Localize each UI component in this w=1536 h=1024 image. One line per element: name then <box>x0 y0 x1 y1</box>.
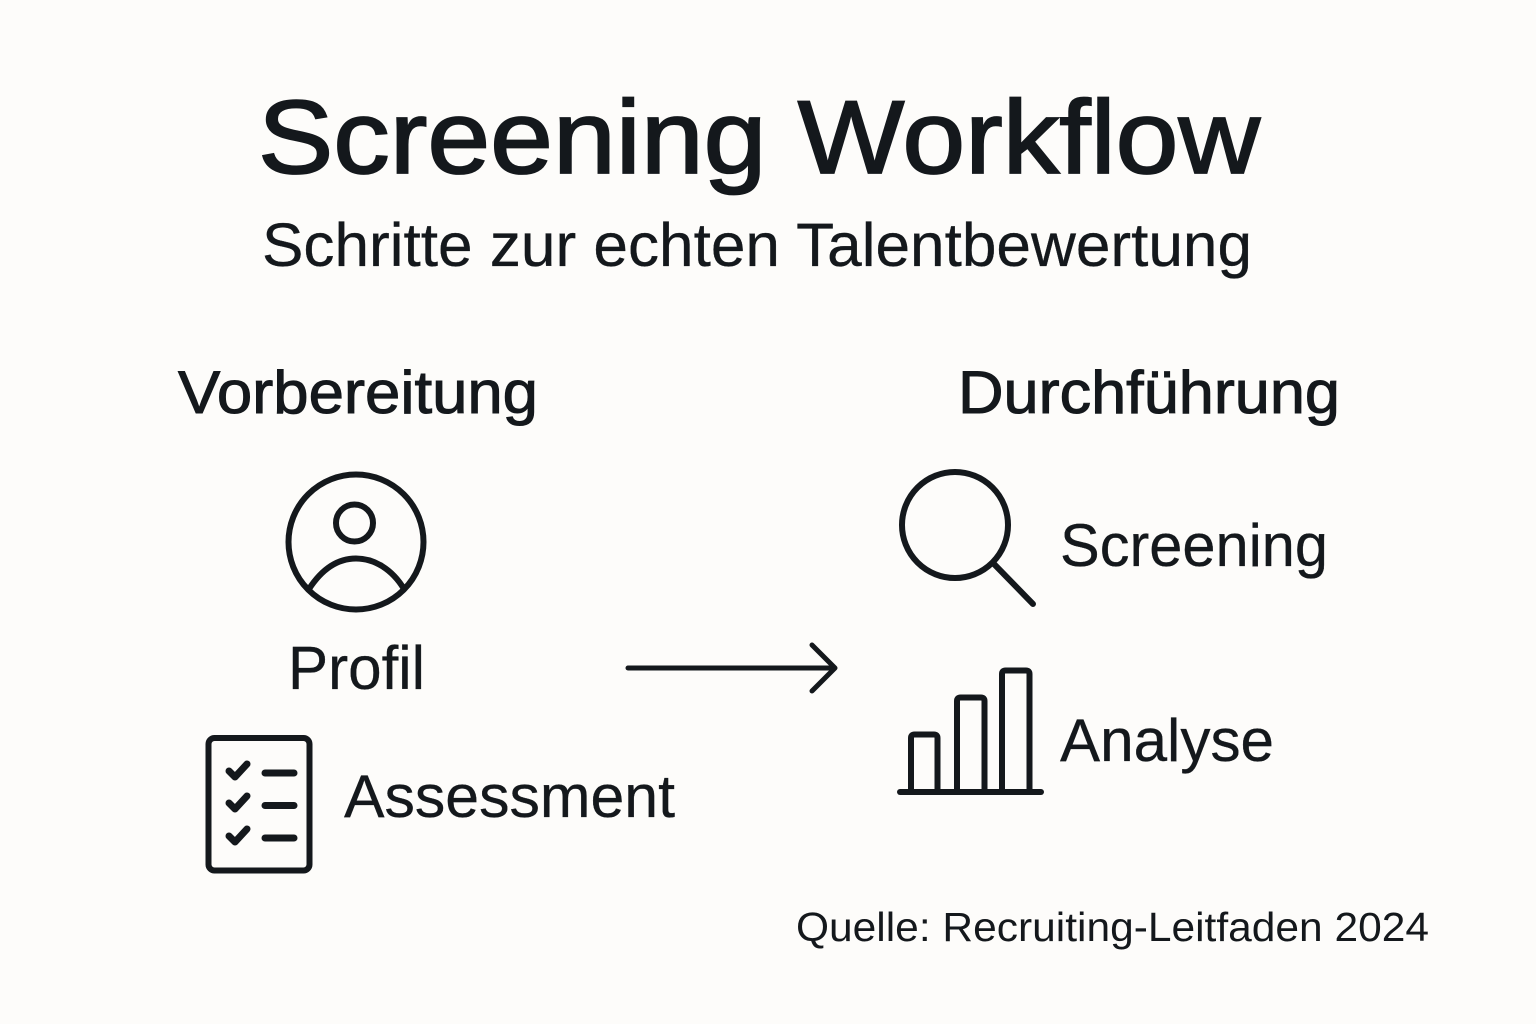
icon: bar chart <box>900 670 1041 792</box>
heading: Vorbereitung: Vorbereitung <box>178 359 538 426</box>
title: Screening Workflow <box>258 80 1261 196</box>
label: Screening: Screening <box>1060 512 1328 579</box>
label: Profil: Profil <box>288 634 425 702</box>
label: Analyse: Analyse <box>1060 707 1274 774</box>
icon: profile <box>288 474 424 610</box>
icon: magnifier <box>902 472 1033 604</box>
heading: Durchführung: Durchführung <box>958 359 1340 426</box>
source note: Quelle: Recruiting-Leitfaden 2024 <box>796 904 1429 950</box>
arrow <box>628 645 835 691</box>
subtitle: Schritte zur echten Talentbewertung <box>262 211 1252 279</box>
icon: checklist <box>208 738 310 870</box>
label: Assessment: Assessment <box>344 763 675 830</box>
